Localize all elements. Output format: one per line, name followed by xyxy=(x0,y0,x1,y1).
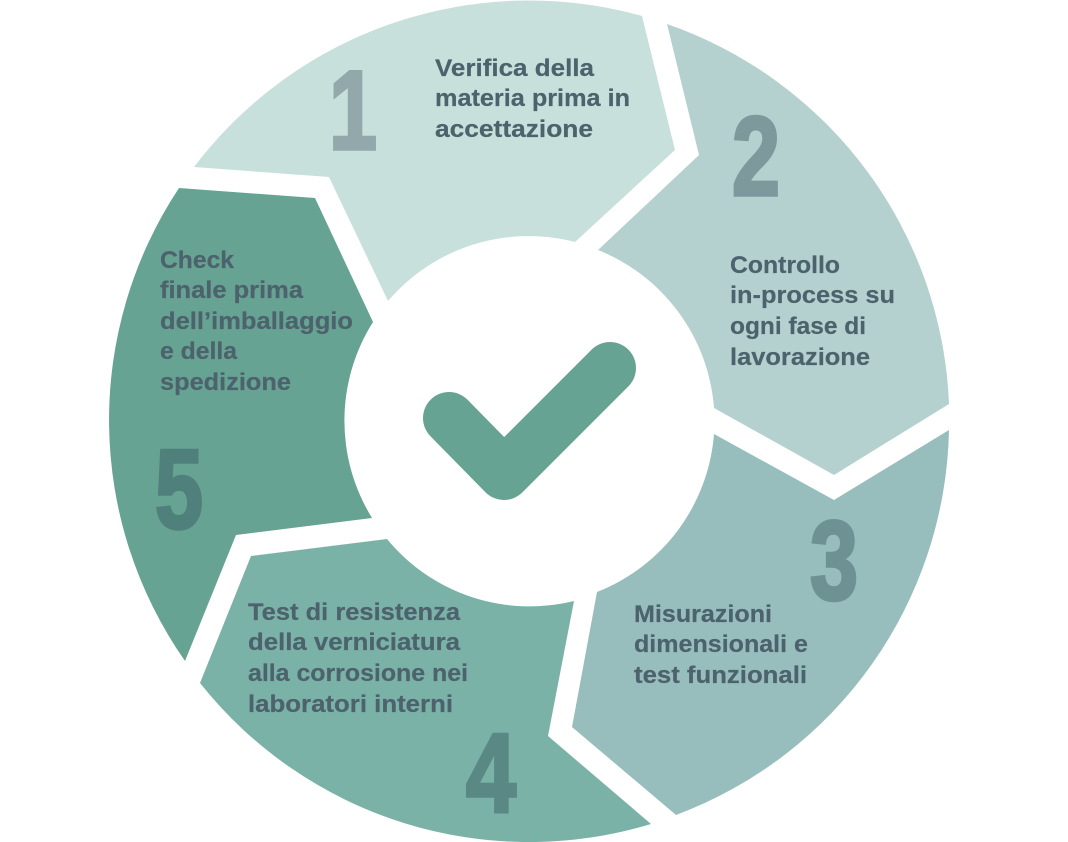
text: step 5: e della xyxy=(160,338,238,365)
segment 3 shape xyxy=(572,430,949,815)
panel: step 2 xyxy=(598,24,949,475)
text: step 5: Check xyxy=(160,247,235,274)
text: step 1 xyxy=(435,55,630,143)
text: step 3: Misurazioni xyxy=(634,601,772,628)
text: step 2: ogni fase di xyxy=(730,313,866,340)
panel: step 1 xyxy=(194,0,675,301)
number 3: 3 xyxy=(810,498,858,623)
text: step 3 xyxy=(634,601,808,689)
text: step 1: accettazione xyxy=(435,116,593,143)
number 4: 4 xyxy=(466,711,516,836)
segment 4 shape xyxy=(200,539,651,842)
text: step 3: dimensionali e xyxy=(634,631,808,658)
panel: step 4 xyxy=(200,539,651,842)
segment 2 shape xyxy=(598,24,949,475)
number 2: 2 xyxy=(732,94,780,219)
text: step 4: alla corrosione nei xyxy=(248,660,468,687)
text: step 4: della verniciatura xyxy=(248,629,461,656)
text: step 2 xyxy=(730,252,895,371)
text: step 5: spedizione xyxy=(160,369,291,396)
icon: check mark xyxy=(449,368,610,474)
panel: step 3 xyxy=(572,430,949,815)
segment 1 shape xyxy=(194,0,675,301)
text: step 5: finale prima xyxy=(160,277,304,304)
segment 5 shape xyxy=(109,188,373,661)
text: step 2: in-process su xyxy=(730,282,895,309)
text: step 4 xyxy=(248,599,468,718)
text: step 5: dell’imballaggio xyxy=(160,308,353,335)
number 5: 5 xyxy=(155,427,203,552)
text: step 5 xyxy=(160,247,353,396)
text: step 3: test funzionali xyxy=(634,662,807,689)
text: step 4: Test di resistenza xyxy=(248,599,461,626)
text: step 2: lavorazione xyxy=(730,344,870,371)
text: step 4: laboratori interni xyxy=(248,691,453,718)
number 1: 1 xyxy=(329,48,377,173)
panel: step 5 xyxy=(109,188,373,661)
text: step 2: Controllo xyxy=(730,252,840,279)
text: step 1: Verifica della xyxy=(435,55,595,82)
text: step 1: materia prima in xyxy=(435,85,630,112)
